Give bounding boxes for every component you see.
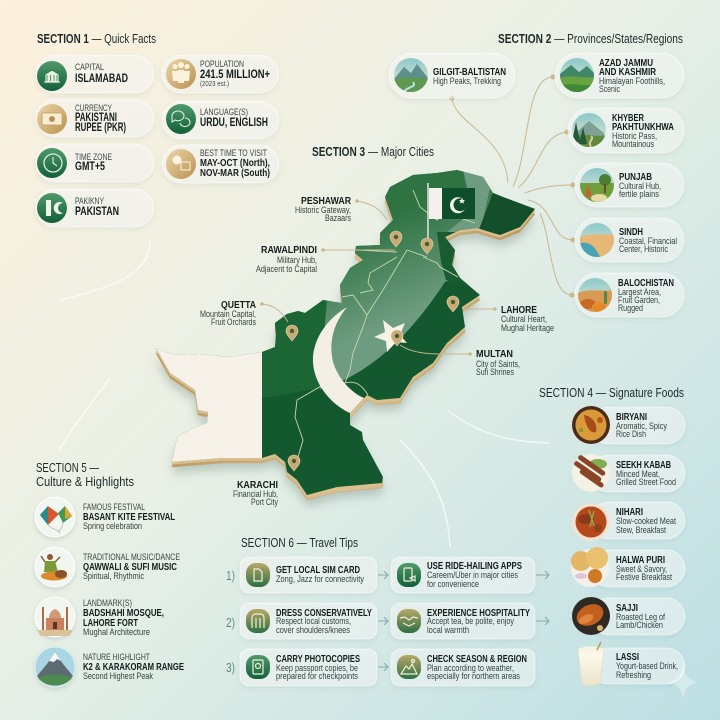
food: lassi: Yogurt-based Drink, [616, 661, 678, 671]
province: Gilgit-Baltistan [389, 53, 515, 98]
city: Peshawar: PESHAWAR [301, 196, 351, 207]
panel: culture and highlights [35, 497, 184, 687]
city: Multan: Sufi Shrines [476, 367, 514, 377]
highlight: landmark: LAHORE FORT [83, 618, 138, 629]
food: biryani [572, 406, 685, 444]
province: Azad Jammu and Kashmir: AZAD JAMMU [599, 58, 653, 69]
province: Khyber Pakhtunkhwa: PAKHTUNKHWA [612, 122, 674, 133]
highlight: nature [35, 647, 184, 687]
food: biryani: Rice Dish [616, 429, 646, 439]
highlight: festival [35, 497, 175, 537]
fact: best time to visit: BEST TIME TO VISIT [200, 148, 267, 158]
tip: season and region [391, 649, 535, 686]
heading: section 2: SECTION 2 — Provinces/States/Regions [498, 31, 683, 46]
food: nihari: Slow-cooked Meat [616, 516, 676, 526]
panel: provinces [389, 53, 684, 317]
tip: photocopies: Keep passport copies, be [276, 663, 358, 673]
highlight: festival: BASANT KITE FESTIVAL [83, 512, 175, 523]
fact: time zone [36, 144, 154, 182]
province: Khyber Pakhtunkhwa: Mountainous [612, 139, 654, 149]
fact: population: 241.5 MILLION+ [200, 69, 270, 81]
fact: country [36, 189, 154, 227]
food: halwa puri [571, 547, 685, 587]
city: Lahore: Cultural Heart, [501, 314, 547, 324]
tip: ride hailing [391, 557, 535, 593]
fact: languages: LANGUAGE(S) [200, 107, 248, 117]
city: Quetta: Fruit Orchards [211, 317, 256, 327]
tip: dress: cover shoulders/knees [276, 625, 350, 635]
province: Sindh: Coastal, Financial [619, 236, 677, 246]
city: Multan [476, 349, 520, 377]
province: Balochistan [575, 273, 684, 317]
highlight: landmark: LANDMARK(S) [83, 598, 132, 608]
highlight: music: QAWWALI & SUFI MUSIC [83, 562, 177, 573]
city: Rawalpindi: Military Hub, [277, 255, 317, 265]
province: Gilgit-Baltistan: GILGIT-BALTISTAN [433, 67, 506, 78]
highlight: landmark: Mughal Architecture [83, 627, 150, 637]
city: Quetta [200, 300, 256, 327]
heading: section 5: Culture & Highlights [36, 474, 134, 489]
city: Karachi: Financial Hub, [233, 489, 278, 499]
tip: season and region: CHECK SEASON & REGION [427, 654, 527, 665]
tip: hospitality: EXPERIENCE HOSPITALITY [427, 608, 530, 619]
city: Peshawar: Historic Gateway, [295, 205, 351, 215]
row numbers [226, 569, 235, 675]
row numbers: 1) [226, 569, 235, 583]
food: sajji: SAJJI [616, 603, 638, 614]
highlight: festival: Spring celebration [83, 521, 142, 531]
province: Balochistan: BALOCHISTAN [618, 278, 674, 289]
highlight: landmark: BADSHAHI MOSQUE, [83, 608, 164, 619]
province connector lines [450, 74, 576, 298]
province: Punjab: Cultural Hub, [619, 181, 661, 191]
fact: population: (2023 est.) [200, 81, 229, 88]
highlight: music: TRADITIONAL MUSIC/DANCE [83, 552, 180, 562]
tip: season and region: Plan according to weather, [427, 663, 514, 673]
city: Rawalpindi: Adjacent to Capital [256, 264, 317, 274]
big star [374, 320, 407, 352]
arrows [378, 571, 549, 671]
food: seekh kabab: SEEKH KABAB [616, 460, 671, 471]
tip: hospitality: local warmth [427, 625, 469, 635]
food: sajji [572, 597, 685, 635]
province: Balochistan: Largest Area, [618, 287, 661, 297]
fact: currency: RUPEE (PKR) [75, 122, 126, 134]
tip: dress: Respect local customs, [276, 616, 351, 626]
highlight: festival: FAMOUS FESTIVAL [83, 502, 145, 512]
panel: quick facts [36, 55, 279, 227]
province: Azad Jammu and Kashmir: AND KASHMIR [599, 67, 656, 78]
highlight: nature: K2 & KARAKORAM RANGE [83, 662, 184, 673]
highlight: nature: Second Highest Peak [83, 671, 153, 681]
fact: best time to visit: NOV-MAR (South) [200, 168, 270, 179]
tip: dress [240, 603, 377, 639]
food: nihari: Stew, Breakfast [616, 525, 666, 535]
food: halwa puri: HALWA PURI [616, 555, 665, 566]
food: seekh kabab [572, 454, 685, 492]
fact: capital: ISLAMABAD [75, 73, 128, 85]
fact: capital [36, 55, 154, 93]
fact: country: PAKISTAN [75, 206, 119, 218]
city: Peshawar: Bazaars [325, 213, 351, 223]
province: Azad Jammu and Kashmir [555, 53, 684, 98]
food: lassi: Refreshing [616, 670, 651, 680]
province: Punjab [575, 163, 684, 207]
city: Lahore: Mughal Heritage [501, 323, 554, 333]
fact: time zone: GMT+5 [75, 161, 105, 173]
fact: currency [36, 99, 154, 137]
city: Karachi [233, 480, 278, 507]
tip: SIM card: GET LOCAL SIM CARD [276, 565, 360, 576]
highlight: landmark [35, 597, 164, 637]
highlight: music: Spiritual, Rhythmic [83, 571, 144, 581]
tip: ride hailing: Careem/Uber in major cities [427, 570, 518, 580]
tip: season and region: especially for northern areas [427, 671, 520, 681]
city: Multan: City of Saints, [476, 359, 520, 369]
province: Khyber Pakhtunkhwa: KHYBER [612, 113, 644, 124]
province: Balochistan: Fruit Garden, [618, 295, 660, 305]
map of Pakistan in flag colours [140, 160, 550, 505]
fact: currency: CURRENCY [75, 103, 112, 113]
food: nihari: NIHARI [616, 507, 643, 518]
panel: travel tips [226, 557, 549, 686]
province: Gilgit-Baltistan: High Peaks, Trekking [433, 76, 501, 86]
province: Sindh: Center, Historic [619, 244, 668, 254]
fact: population [162, 55, 279, 93]
food: biryani: BIRYANI [616, 412, 647, 423]
heading: section 1: SECTION 1 — Quick Facts [37, 31, 156, 46]
fact: languages [162, 101, 279, 139]
heading: section 5 [36, 460, 134, 489]
city: Quetta: QUETTA [221, 300, 256, 311]
city: Multan: MULTAN [476, 349, 513, 360]
row numbers: 2) [226, 616, 235, 630]
heading: section 4: SECTION 4 — Signature Foods [539, 385, 684, 400]
food: seekh kabab: Grilled Street Food [616, 477, 676, 487]
food: sajji: Lamb/Chicken [616, 620, 663, 630]
province: Khyber Pakhtunkhwa: Historic Pass, [612, 131, 657, 141]
city leader lines [260, 199, 497, 356]
fact: capital: CAPITAL [75, 62, 104, 72]
province: Punjab: PUNJAB [619, 172, 652, 183]
city: Karachi: Port City [251, 497, 278, 507]
food: halwa puri: Sweet & Savory, [616, 564, 667, 574]
tip: SIM card [240, 557, 377, 593]
tip: photocopies: prepared for checkpoints [276, 671, 358, 681]
fact: best time to visit: MAY-OCT (North), [200, 158, 270, 169]
tip: ride hailing: for convenience [427, 579, 479, 589]
city: Karachi: KARACHI [237, 480, 278, 491]
food: halwa puri: Festive Breakfast [616, 572, 672, 582]
province: Sindh [575, 218, 684, 262]
city: Peshawar [295, 196, 351, 223]
fact: time zone: TIME ZONE [75, 152, 112, 162]
fact: population: POPULATION [200, 59, 244, 69]
heading: section 6: SECTION 6 — Travel Tips [241, 535, 358, 550]
province: Punjab: fertile plains [619, 189, 659, 199]
province: Azad Jammu and Kashmir: Himalayan Foothills, [599, 76, 665, 86]
heading: section 3: SECTION 3 — Major Cities [312, 144, 434, 159]
row numbers: 3) [226, 661, 235, 675]
city: Lahore: LAHORE [501, 305, 537, 316]
food: nihari [572, 502, 685, 541]
flag on pole [427, 183, 475, 248]
fact: currency: PAKISTANI [75, 112, 117, 124]
map pins [286, 231, 459, 471]
city: Rawalpindi: RAWALPINDI [261, 245, 317, 256]
province border lines [295, 190, 475, 457]
province: Balochistan: Rugged [618, 303, 643, 313]
food: sajji: Roasted Leg of [616, 612, 665, 622]
tip: ride hailing: USE RIDE-HAILING APPS [427, 561, 522, 572]
food: biryani: Aromatic, Spicy [616, 421, 667, 431]
province: Sindh: SINDH [619, 227, 643, 238]
highlight: nature: NATURE HIGHLIGHT [83, 652, 150, 662]
province: Azad Jammu and Kashmir: Scenic [599, 84, 620, 94]
fact: best time to visit [162, 145, 279, 183]
tip: SIM card: Zong, Jazz for connectivity [276, 574, 364, 584]
city: Rawalpindi [256, 245, 317, 274]
panel: signature foods [571, 406, 685, 686]
city: Lahore [501, 305, 554, 333]
food: lassi: LASSI [616, 652, 639, 663]
fact: country: PAKIKNY [75, 196, 104, 206]
tip: photocopies [240, 649, 377, 686]
tip: photocopies: CARRY PHOTOCOPIES [276, 654, 360, 665]
big crescent [313, 307, 364, 413]
city: Quetta: Mountain Capital, [200, 309, 256, 319]
food: seekh kabab: Minced Meat, [616, 469, 660, 479]
heading: section 5: SECTION 5 — [36, 460, 99, 475]
tip: dress: DRESS CONSERVATIVELY [276, 608, 372, 619]
fact: languages: URDU, ENGLISH [200, 117, 268, 129]
province: Khyber Pakhtunkhwa [568, 108, 684, 153]
food: lassi [578, 642, 685, 686]
highlight: music [35, 547, 180, 587]
tip: hospitality: Accept tea, be polite, enjoy [427, 616, 514, 626]
tip: hospitality [391, 603, 535, 639]
